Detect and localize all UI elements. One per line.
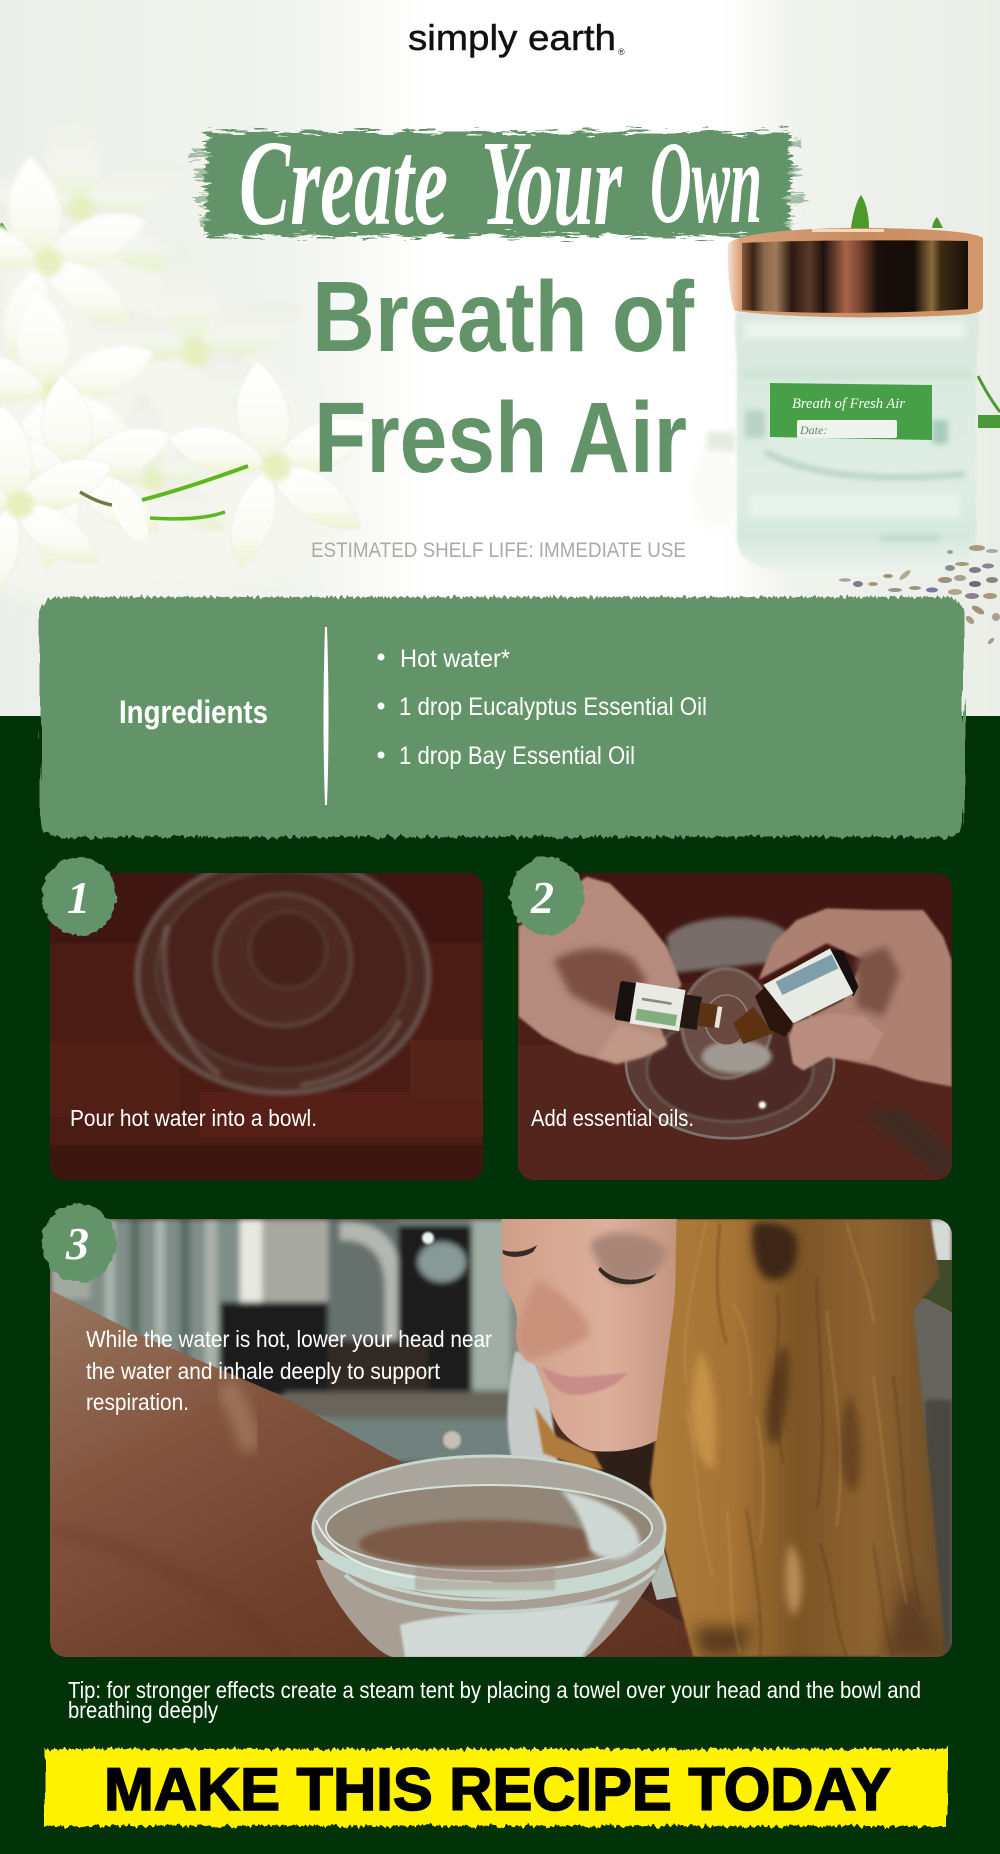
eucalyptus bottle [733,948,858,1044]
step 3 [42,1204,952,1657]
instruction text: While the water is hot, lower your head near [86,1326,492,1352]
image: leaves behind jar [693,195,1000,530]
left hand [518,877,682,1063]
bay bottle [614,981,722,1032]
right hand [758,908,952,1087]
photo: bowl on wood [50,857,483,1180]
number badge 3 [42,1204,116,1282]
lid reflective side [742,240,968,313]
logo: simply earth: simply earth [408,17,616,58]
number badge 1: 1 [67,872,90,923]
jar highlights [742,322,972,541]
caption: Add essential oils. [531,1105,694,1131]
label title: Breath of Fresh Air [792,396,905,412]
ingredient list: 1 drop Eucalyptus Essential Oil [399,693,707,721]
label background [770,383,932,440]
lid copper shell [728,228,983,317]
divider [324,627,328,805]
ingredient list: 1 drop Bay Essential Oil [399,742,635,770]
sweater [880,1298,952,1657]
dark under chin [597,1444,655,1501]
number badge 3: 3 [65,1218,89,1269]
label date field [797,420,897,438]
panel: ingredients [40,597,964,837]
heading: Breath of Fresh Air: Fresh Air [314,382,687,494]
window and plant in corner [928,1219,952,1260]
ingredient list [378,645,707,770]
image: white flowers [0,158,360,584]
scarf [506,1350,559,1460]
jar label [770,383,932,440]
script heading: Your [481,116,623,251]
brush stroke background [192,132,802,236]
jar body [735,312,979,576]
hair [650,1219,945,1657]
script heading [239,116,762,251]
scarf below hair [651,1551,677,1600]
ingredient list: Hot water* [400,645,510,673]
number badge 1 [42,857,116,935]
kitchen background [50,1219,550,1463]
bowl rim and interior [313,1456,665,1600]
face [502,1219,677,1452]
tip text: breathing deeply [68,1697,218,1723]
photo base [50,1219,952,1657]
glass bowl upper rim [667,917,797,973]
panel background [40,597,964,837]
left finger [597,1023,667,1063]
nose shading [517,1280,590,1360]
eye socket shadow [590,1233,667,1284]
wood counter [50,1290,740,1657]
bowl centre [682,968,772,1078]
bowl body [316,1556,664,1657]
heading: Breath of Fresh Air: Breath of [312,261,695,373]
yellow brush background [44,1749,948,1826]
logo registered mark: ® [618,47,625,57]
header background [0,0,1000,716]
image: jar of Breath of Fresh Air [728,228,983,576]
lips [542,1367,628,1395]
hair under chin [535,1407,603,1470]
heading: Breath of Fresh Air [312,261,695,494]
number badge 2 [510,857,584,935]
photo: adding essential oils [518,873,952,1180]
jar lid [728,228,983,317]
number badge 2: 2 [530,872,554,923]
call to action banner [44,1749,948,1826]
banner: Create Your Own: Own [650,117,762,248]
button text: MAKE THIS RECIPE TODAY [104,1756,891,1823]
eyelashes [598,1267,657,1284]
glass bowl lower ring [626,988,834,1138]
step 1 [42,857,483,1180]
script heading: Create [239,116,448,251]
instruction text [86,1326,492,1415]
lid highlight [812,229,884,232]
tip text [68,1677,921,1723]
heading: Ingredients: Ingredients [119,694,268,730]
image: dried lavender buds [839,545,1000,645]
bowl front bands [314,1535,666,1598]
shelf life note: ESTIMATED SHELF LIFE: IMMEDIATE USE [311,539,686,562]
photo: woman inhaling steam over bowl [50,1219,952,1657]
right thumb [790,1013,883,1070]
instruction text: respiration. [86,1389,189,1415]
label date field: Date: [799,423,827,437]
banner: Create Your Own [192,116,802,251]
step 2 [510,857,952,1180]
glass bowl [313,1456,666,1657]
wood shadow [863,1107,952,1177]
instruction text: the water and inhale deeply to support [86,1358,441,1384]
caption: Pour hot water into a bowl. [70,1105,317,1131]
